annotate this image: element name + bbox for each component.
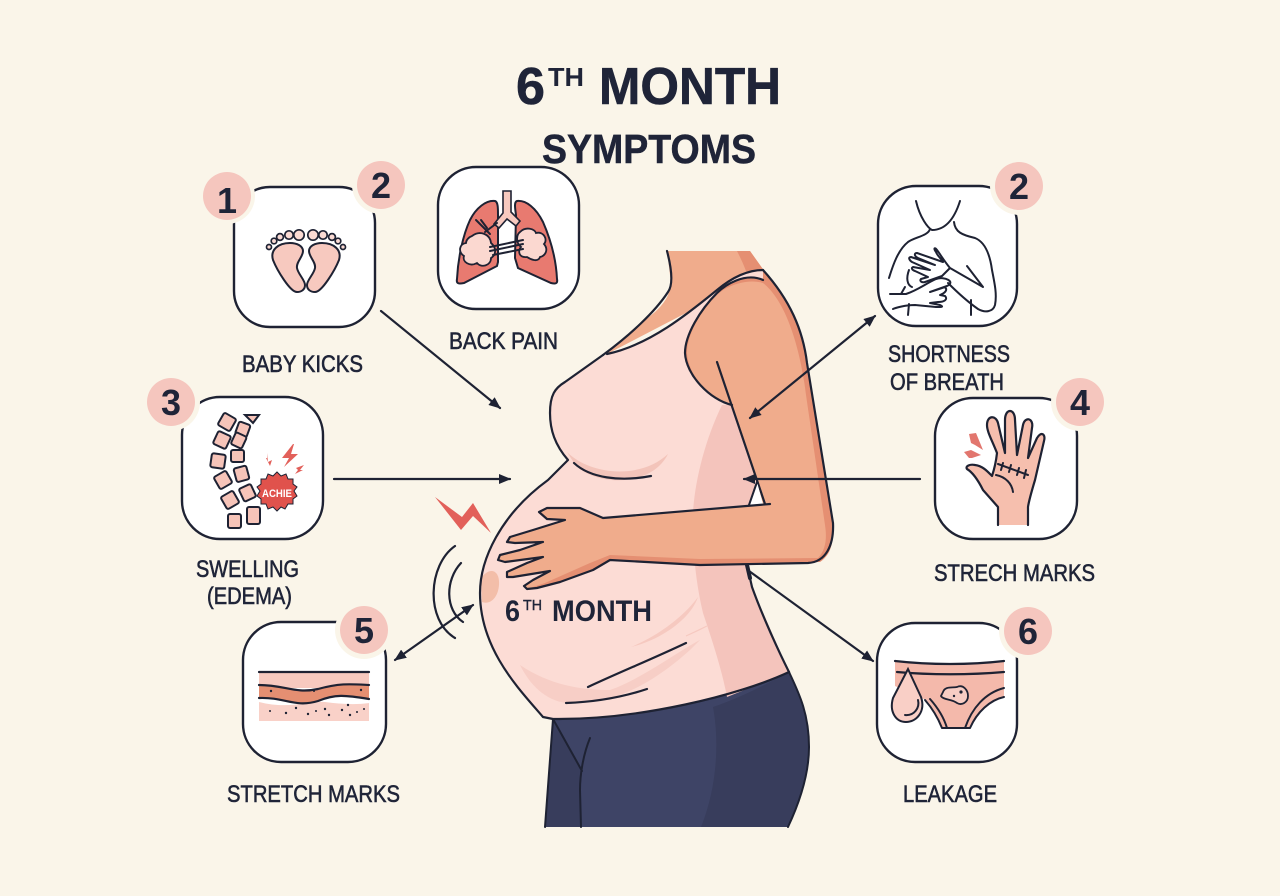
arrow: swelling [334, 478, 510, 480]
badge 2: 2 [371, 165, 391, 206]
badge 4 [1056, 378, 1104, 426]
icon: underwear and drop [892, 661, 1004, 728]
icon: lungs [457, 191, 557, 284]
badge 5: 5 [354, 610, 374, 651]
panel: baby kicks [199, 156, 410, 327]
badge 2 right [995, 162, 1043, 210]
arm and hand [498, 270, 833, 589]
icon: hand [964, 411, 1044, 525]
panel: leakage [877, 602, 1057, 762]
belly label: MONTH [552, 595, 652, 628]
label: leakage: LEAKAGE [903, 781, 997, 808]
neck [603, 251, 765, 355]
icon: red lightning [435, 497, 491, 533]
title: SYMPTOMS [542, 126, 756, 172]
arrow: leakage [749, 571, 873, 661]
icon: spine [210, 412, 260, 528]
belly label: TH [523, 597, 542, 614]
arrow: strech marks [744, 478, 920, 480]
icon: baby feet [266, 230, 346, 292]
icon: kick arcs [434, 546, 463, 638]
label: stretch marks left: STRETCH MARKS [227, 781, 400, 808]
label: swelling [196, 556, 299, 610]
icon: skin layers [259, 672, 369, 721]
label: back pain: BACK PAIN [449, 328, 558, 355]
tank top [480, 270, 800, 719]
label: strech marks right: STRECH MARKS [934, 560, 1095, 587]
badge 1: 1 [217, 180, 237, 221]
panel: back pain [438, 167, 579, 309]
belly label: 6 [505, 595, 520, 628]
icon: ache burst: ACHIE [262, 488, 292, 500]
badge 6: 6 [1018, 611, 1038, 652]
badge 3: 3 [161, 382, 181, 423]
badge 5 [340, 606, 388, 654]
panel: stretch marks left [243, 601, 393, 762]
badge 3 [147, 378, 195, 426]
arrow: baby kicks [381, 311, 500, 408]
panel: shortness of breath [878, 157, 1048, 326]
title [516, 58, 781, 172]
icon: chest and hands [889, 201, 996, 315]
label: baby kicks: BABY KICKS [242, 351, 363, 378]
belly label [505, 595, 652, 628]
badge 6 [1004, 607, 1052, 655]
label: swelling: (EDEMA) [207, 583, 292, 610]
arrow: stretch marks [395, 605, 473, 660]
panel: strech marks right [935, 373, 1109, 539]
label: shortness of breath [888, 341, 1010, 396]
badge 4: 4 [1070, 382, 1090, 423]
pregnant figure [480, 251, 833, 827]
label: swelling: SWELLING [196, 556, 299, 583]
pants [545, 672, 809, 827]
badge 1 [203, 172, 251, 221]
title: MONTH [599, 58, 781, 116]
label: shortness of breath: OF BREATH [890, 369, 1004, 396]
arrow: shortness of breath [750, 316, 875, 418]
title: 6 [516, 58, 545, 116]
panel: swelling [142, 373, 323, 539]
title: TH [548, 62, 584, 92]
icon: ache burst [257, 444, 304, 511]
badge 2 [357, 161, 405, 209]
label: shortness of breath: SHORTNESS [888, 341, 1010, 368]
badge 2 right: 2 [1009, 166, 1029, 207]
